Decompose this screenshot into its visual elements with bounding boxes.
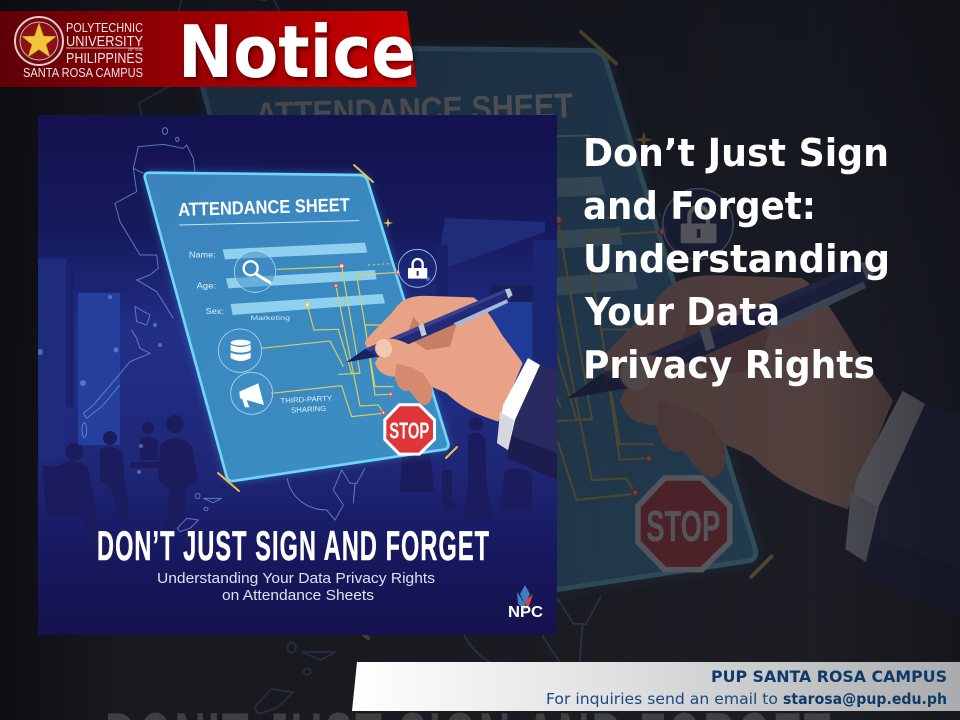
university name: PHILIPPINES — [66, 50, 143, 67]
university seal — [15, 17, 63, 65]
icon: megaphone — [231, 372, 273, 414]
NPC logo — [509, 585, 542, 617]
accent strokes — [218, 165, 457, 491]
circuit nodes — [270, 264, 400, 414]
icon: magnifier — [234, 251, 276, 292]
hand with pen — [346, 288, 523, 422]
notice banner — [0, 10, 417, 94]
poster subheading — [158, 572, 434, 600]
sheet body — [145, 173, 448, 481]
campus name: PUP SANTA ROSA CAMPUS — [711, 667, 947, 686]
footer contact bar — [352, 662, 960, 711]
panel: poster image — [37, 115, 559, 635]
icon: database — [218, 329, 262, 372]
poster subheading: on Attendance Sheets — [222, 587, 374, 604]
marketing label: Marketing — [251, 315, 290, 322]
stop sign — [383, 403, 436, 456]
circuit lines — [262, 263, 398, 417]
form fields — [223, 243, 385, 315]
university name: UNIVERSITY — [66, 33, 143, 50]
university name: SANTA ROSA CAMPUS — [23, 66, 143, 80]
attendance sheet — [145, 173, 523, 481]
inquiries line: starosa@pup.edu.ph — [783, 690, 947, 708]
field labels — [189, 250, 224, 316]
field labels: Sex: — [206, 306, 224, 316]
title: Understanding — [583, 237, 890, 281]
title: and Forget: — [583, 184, 816, 228]
NPC logo: NPC — [508, 604, 543, 621]
stop sign: STOP — [389, 418, 429, 444]
room background: windows — [38, 218, 557, 458]
icon: padlock — [398, 249, 436, 287]
title — [583, 131, 890, 387]
cuff and sleeve — [497, 358, 559, 481]
third-party sharing label — [280, 396, 332, 413]
title: Privacy Rights — [583, 343, 875, 387]
poster subheading: Understanding Your Data Privacy Rights — [157, 570, 435, 587]
thumb — [375, 339, 447, 369]
title: Don’t Just Sign — [583, 131, 889, 175]
third-party sharing label: THIRD-PARTY — [280, 394, 332, 405]
poster heading: DON’T JUST SIGN AND FORGET — [97, 523, 489, 570]
title: Your Data — [584, 290, 780, 334]
university name: POLYTECHNIC — [66, 21, 143, 35]
map outlines — [82, 128, 198, 532]
dust specks — [37, 277, 430, 474]
map south islands — [195, 468, 365, 520]
inquiries line — [546, 690, 947, 708]
university name — [23, 21, 143, 80]
inquiries line: For inquiries send an email to — [546, 690, 778, 708]
sheet heading: ATTENDANCE SHEET — [178, 194, 351, 220]
artwork: map, sheet, hand — [82, 128, 559, 532]
pen — [346, 288, 513, 362]
sheet glow — [145, 173, 448, 481]
field labels: Age: — [197, 281, 216, 291]
third-party sharing label: SHARING — [291, 404, 327, 415]
field labels: Name: — [189, 250, 216, 260]
notice heading: Notice — [178, 10, 416, 94]
university name: OF THE — [128, 47, 143, 52]
silhouettes of seated people — [42, 415, 532, 540]
